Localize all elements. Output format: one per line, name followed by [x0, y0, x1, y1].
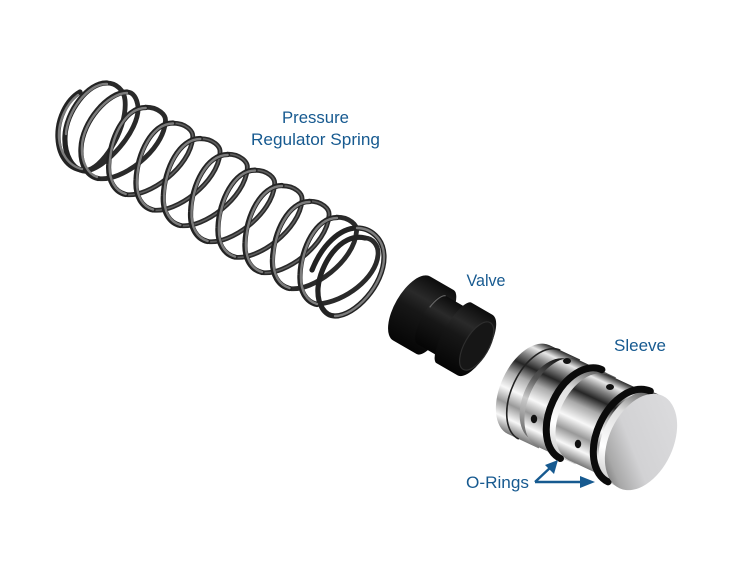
sleeve label: Sleeve	[614, 336, 666, 355]
sleeve end face	[590, 382, 692, 502]
arrows to o-rings	[535, 460, 595, 488]
valve	[378, 268, 506, 384]
valve label: Valve	[466, 271, 506, 290]
sleeve	[482, 332, 692, 502]
o-rings label: O-Rings	[466, 473, 529, 492]
pressure regulator spring	[58, 83, 384, 316]
spring label	[251, 108, 380, 149]
o-ring rear	[532, 357, 602, 459]
spring label: Regulator Spring	[251, 130, 380, 149]
spring label: Pressure	[282, 108, 349, 127]
o-ring front	[579, 378, 650, 482]
sleeve holes	[531, 358, 614, 448]
